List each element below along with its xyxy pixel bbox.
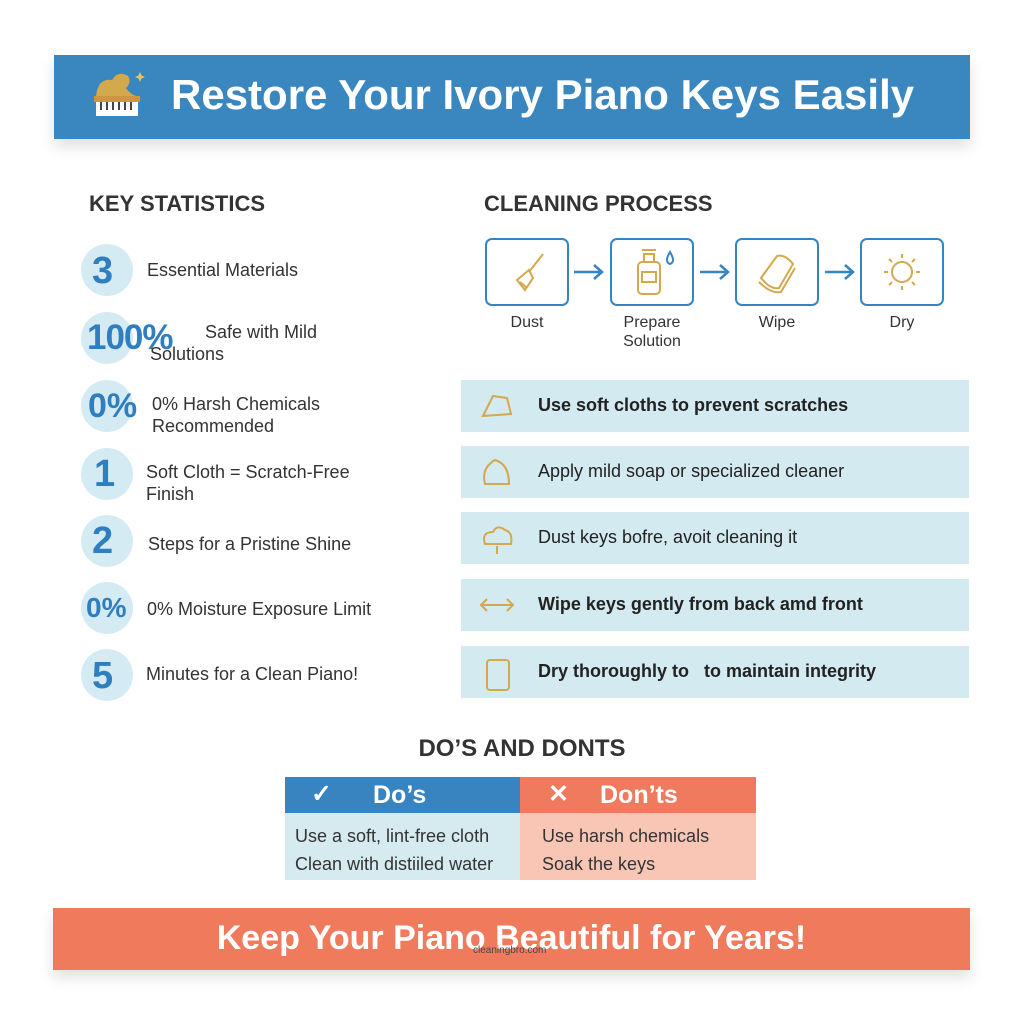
text: 0%: [86, 592, 126, 623]
do's column: Use a soft, lint-free cloth: [295, 826, 489, 846]
don'ts column: Don’ts: [600, 781, 678, 809]
tip 3: [461, 512, 969, 564]
step: prepare solution: [610, 238, 694, 306]
arrow: [574, 264, 604, 280]
don'ts column: ✕: [548, 780, 569, 808]
do's column: Do’s: [373, 781, 426, 809]
step: wipe: [735, 238, 819, 306]
tips list: [461, 380, 969, 698]
text: Essential Materials: [147, 260, 298, 280]
do's and don'ts table: [285, 777, 756, 880]
text: 0% Harsh Chemicals: [152, 394, 320, 414]
text: Soft Cloth = Scratch-Free: [146, 462, 350, 482]
heading: cleaning process: CLEANING PROCESS: [484, 191, 713, 216]
tip 5: [461, 646, 969, 698]
footer banner: Keep Your Piano Beautiful for Years!: [217, 919, 806, 957]
title: Restore Your Ivory Piano Keys Easily: [171, 71, 914, 118]
text: 3: [92, 250, 113, 292]
header banner: [54, 55, 970, 139]
tip 5: Dry thoroughly to to maintain integrity: [538, 661, 876, 681]
process flow: [485, 238, 944, 350]
stats list: [78, 240, 408, 705]
tip 4: Wipe keys gently from back amd front: [538, 594, 863, 614]
text: Minutes for a Clean Piano!: [146, 664, 358, 684]
heading: key statistics: KEY STATISTICS: [89, 191, 265, 216]
process flow: Solution: [623, 333, 681, 350]
process flow: Wipe: [759, 314, 795, 331]
text: Recommended: [152, 416, 274, 436]
do's column: [285, 777, 520, 880]
don'ts column: Soak the keys: [542, 854, 655, 874]
step: dust: [485, 238, 569, 306]
text: Safe with Mild: [205, 322, 317, 342]
text: 100%: [87, 318, 173, 357]
tip 1: [461, 380, 969, 432]
text: 2: [92, 520, 113, 562]
icon: piano: [94, 72, 145, 116]
text: 1: [94, 453, 115, 495]
do's column: Clean with distiiled water: [295, 854, 493, 874]
text: 0% Moisture Exposure Limit: [147, 599, 371, 619]
footer banner: [53, 908, 970, 970]
tip 1: Use soft cloths to prevent scratches: [538, 395, 848, 415]
process flow: Prepare: [624, 314, 680, 331]
do's column: ✓: [311, 780, 332, 808]
don'ts column: [520, 777, 756, 880]
tip 3: Dust keys bofre, avoit cleaning it: [538, 527, 797, 547]
heading: do's and don'ts: DO’S AND DONTS: [418, 735, 626, 762]
text: Steps for a Pristine Shine: [148, 534, 351, 554]
tip 2: Apply mild soap or specialized cleaner: [538, 461, 844, 481]
process flow: Dry: [890, 314, 914, 331]
tip 4: [461, 579, 969, 631]
text: 5: [92, 655, 113, 697]
don'ts column: Use harsh chemicals: [542, 826, 709, 846]
process flow: Dust: [511, 314, 543, 331]
tip 2: [461, 446, 969, 498]
text: Finish: [146, 484, 194, 504]
footer banner: cleaningbro.com: [473, 945, 546, 956]
text: Solutions: [150, 344, 224, 364]
text: 0%: [88, 387, 137, 425]
step: dry: [860, 238, 944, 306]
